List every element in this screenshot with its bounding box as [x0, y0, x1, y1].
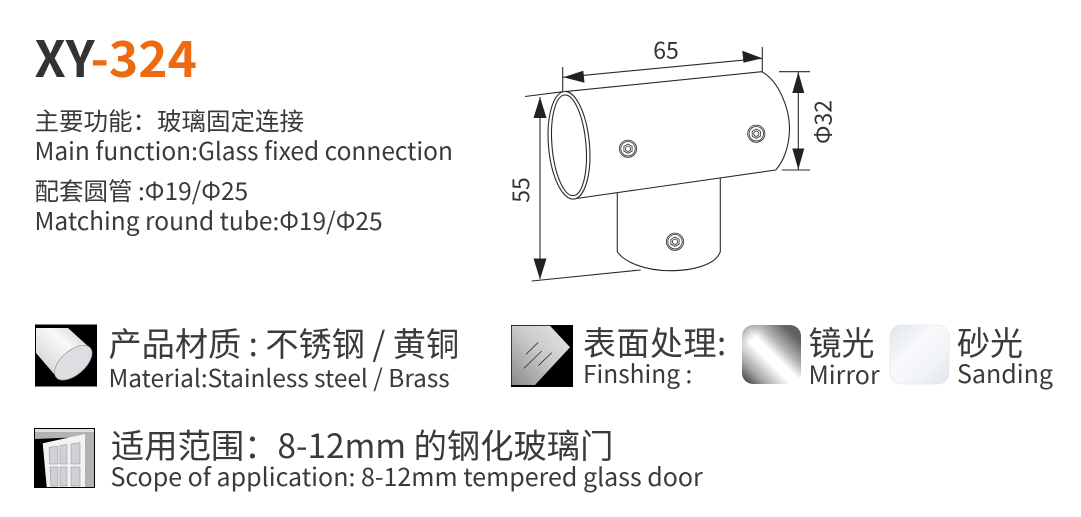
text block: material [108, 317, 459, 394]
dimension 65 lines [563, 47, 762, 91]
swatch: sanding [890, 325, 949, 384]
text block: scope of application: Scope of application: 8-12mm tempered glass door [110, 458, 703, 494]
dimension 55 lines [525, 92, 641, 281]
tube opening [544, 90, 594, 201]
screw bottom [666, 233, 684, 250]
dimension label 55: 55 [502, 177, 536, 203]
label: mirror: 镜光 [808, 317, 874, 365]
icon: glass door [34, 428, 95, 488]
title: model number: XY-324 [34, 20, 197, 92]
text block: scope of application: 适用范围：8-12mm 的钢化玻璃门 [111, 418, 613, 468]
dimension label Φ32: Φ32 [804, 100, 838, 144]
connector stem [617, 178, 720, 271]
text block: matching tube [34, 173, 383, 238]
text block: scope of application [110, 418, 703, 494]
text block: finishing: Finshing : [583, 356, 692, 391]
screw right [748, 125, 765, 142]
text block: material: 产品材质 : 不锈钢 / 黄铜 [108, 317, 459, 366]
connector tube body [564, 72, 790, 199]
label: mirror [808, 317, 880, 392]
text block: main function: 主要功能：玻璃固定连接 [34, 103, 304, 138]
text block: material: Material:Stainless steel / Brass [108, 360, 450, 394]
label: sanding: 砂光 [957, 317, 1023, 365]
label: sanding [957, 317, 1053, 391]
text block: main function [34, 103, 453, 168]
dimension Φ32 lines [779, 72, 810, 170]
text block: finishing [583, 317, 727, 391]
text block: finishing: 表面处理: [583, 317, 727, 365]
screw left [619, 140, 637, 157]
label: mirror: Mirror [808, 356, 880, 392]
dimension label 65: 65 [653, 32, 679, 66]
text block: matching tube: 配套圆管 :Φ19/Φ25 [34, 173, 248, 208]
swatch: mirror [742, 325, 801, 384]
label: sanding: Sanding [957, 355, 1053, 391]
text block: main function: Main function:Glass fixed connection [34, 132, 453, 168]
icon: surface finishing [511, 325, 573, 387]
icon: material tube [35, 324, 98, 387]
text block: matching tube: Matching round tube:Φ19/Φ25 [34, 202, 383, 238]
